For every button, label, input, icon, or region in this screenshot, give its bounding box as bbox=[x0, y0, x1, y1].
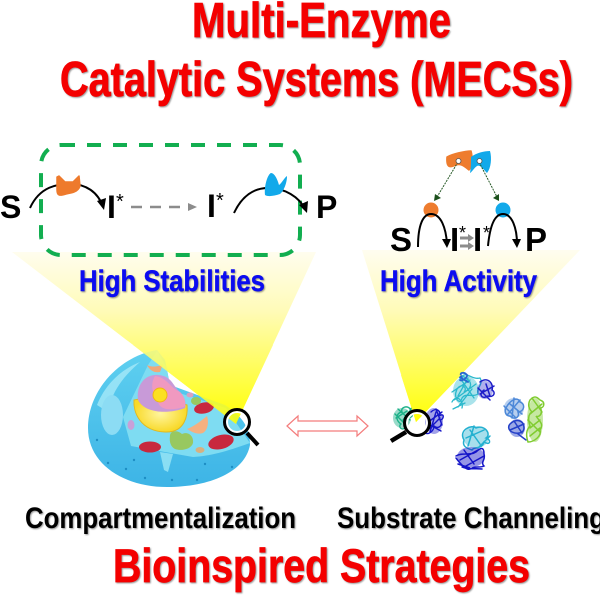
small green vacuole bbox=[191, 397, 201, 405]
anchor circle blue bbox=[477, 158, 482, 164]
small double arrows bbox=[460, 238, 469, 246]
arc right head bbox=[512, 239, 521, 248]
lens highlight bbox=[407, 413, 427, 433]
lens highlight bbox=[227, 412, 247, 432]
nucleus pink bbox=[152, 376, 185, 409]
panel: high activity pathway bbox=[390, 151, 547, 258]
product P: P bbox=[316, 189, 337, 225]
nucleus purple bbox=[138, 375, 185, 412]
letter I left: I bbox=[450, 221, 459, 258]
intermediate I: I bbox=[107, 189, 116, 225]
arc left bbox=[418, 214, 447, 247]
arrow I to P bbox=[234, 188, 305, 213]
dotted link left bbox=[437, 162, 458, 197]
heading: high stabilities: High Stabilities bbox=[79, 265, 265, 298]
icon: magnifier left bbox=[224, 410, 258, 445]
dotted link right bbox=[479, 162, 497, 197]
mitochondrion left bbox=[139, 442, 161, 452]
mitochondrion top bbox=[193, 401, 215, 415]
asterisk right: * bbox=[483, 223, 490, 243]
icon: orange enzyme bbox=[57, 176, 80, 195]
icon: magnifier right bbox=[391, 410, 430, 441]
orange ball bbox=[424, 202, 438, 218]
arrowhead bbox=[97, 198, 106, 210]
dashed arrow bbox=[131, 206, 190, 208]
letter I right: I bbox=[473, 221, 482, 258]
substrate S: S bbox=[0, 189, 21, 225]
golgi top bbox=[147, 364, 163, 372]
intermediate I second: I bbox=[207, 188, 216, 224]
icon: blue enzyme bbox=[470, 151, 491, 173]
blue ball bbox=[496, 202, 510, 218]
arc right bbox=[488, 214, 517, 246]
handle bbox=[391, 432, 406, 441]
arrow S to I bbox=[30, 184, 103, 208]
illustration: protein structures bbox=[393, 373, 544, 469]
letter S: S bbox=[390, 221, 412, 258]
cut interior bbox=[123, 351, 250, 457]
double arrow bbox=[287, 416, 368, 436]
asterisk: * bbox=[116, 191, 124, 213]
protein: teal blue top bbox=[452, 373, 494, 409]
letter P: P bbox=[525, 221, 547, 258]
protein: blue behind lens bbox=[425, 408, 443, 434]
illustration: animal cell bbox=[88, 350, 250, 487]
protein: cyan and navy lower bbox=[456, 426, 490, 469]
protein: green behind lens bbox=[393, 407, 415, 429]
lens bbox=[224, 410, 250, 434]
cell membrane bbox=[88, 350, 250, 487]
cone tip over protein bbox=[401, 375, 461, 422]
small vesicle lower bbox=[196, 447, 204, 453]
small arrowheads bbox=[468, 234, 474, 250]
mitochondrion right bbox=[207, 432, 235, 452]
small vesicle upper bbox=[186, 392, 194, 398]
lens bbox=[404, 410, 430, 436]
membrane pores bbox=[96, 439, 233, 481]
link arrowhead left bbox=[434, 194, 441, 201]
small vesicle bbox=[128, 420, 134, 430]
icon: orange enzyme bbox=[447, 151, 472, 170]
membrane drip bbox=[160, 452, 173, 472]
title bbox=[60, 0, 573, 107]
arc left head bbox=[442, 239, 451, 248]
asterisk left: * bbox=[459, 223, 466, 243]
spotlight cone: left bbox=[12, 252, 316, 424]
nucleolus bbox=[153, 388, 167, 402]
nucleus envelope bbox=[134, 395, 187, 432]
arrowhead second bbox=[299, 201, 308, 213]
golgi right bbox=[187, 416, 208, 434]
link arrowhead right bbox=[493, 194, 499, 201]
asterisk second: * bbox=[216, 190, 224, 212]
icon: blue enzyme bbox=[265, 173, 287, 196]
dashed arrowhead bbox=[188, 203, 197, 211]
dashed box bbox=[41, 145, 300, 255]
membrane highlight bbox=[97, 362, 140, 412]
heading: high activity: High Activity bbox=[380, 265, 537, 298]
pale blob bbox=[101, 395, 123, 435]
handle bbox=[247, 433, 258, 445]
anchor circle orange bbox=[456, 158, 461, 164]
cone tip over cell bbox=[133, 345, 273, 424]
green vacuole bbox=[170, 431, 193, 450]
label: compartmentalization: Compartmentalization bbox=[25, 502, 296, 535]
protein: blue and green pair bbox=[504, 397, 544, 442]
panel: high stabilities pathway bbox=[0, 145, 337, 255]
footer heading: Bioinspired Strategies bbox=[113, 539, 530, 592]
spotlight cone: right bbox=[362, 250, 580, 422]
